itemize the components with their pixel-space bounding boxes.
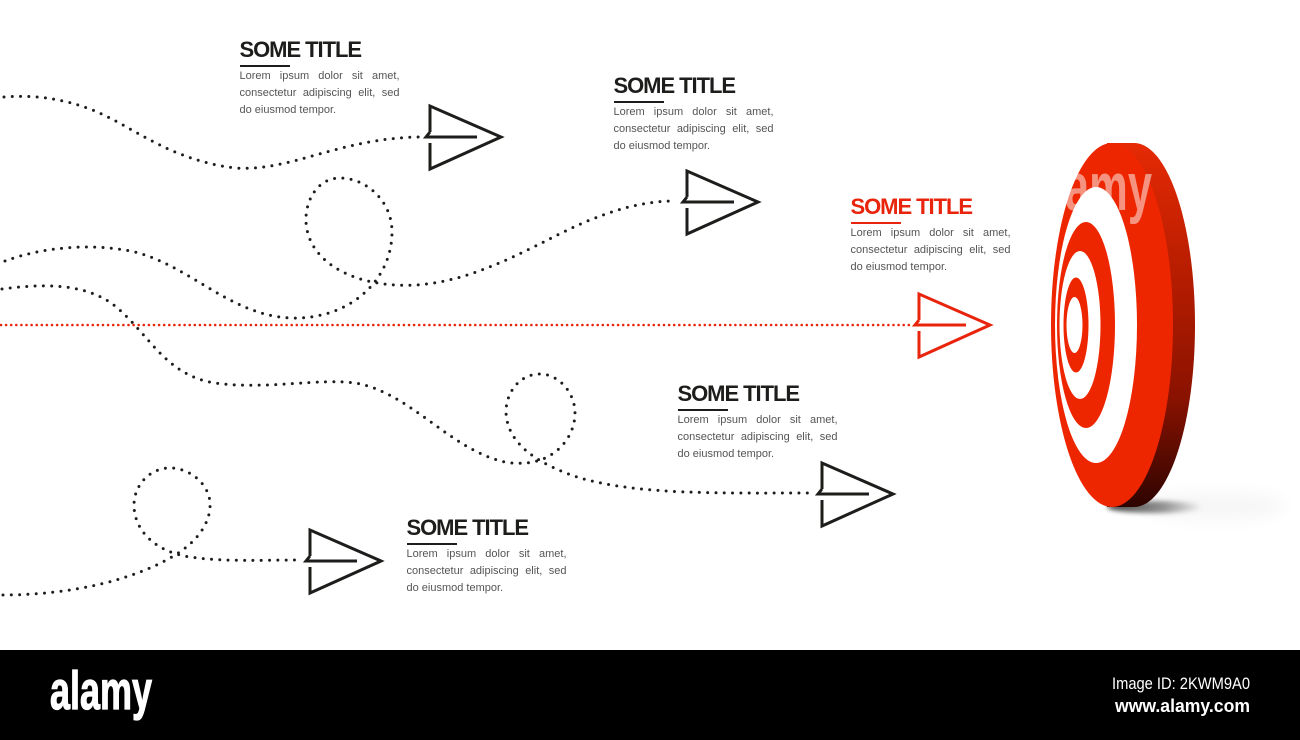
text block 4: [678, 381, 838, 460]
text block 5: do eiusmod tempor.: [406, 582, 503, 594]
paper plane 4: [818, 463, 893, 526]
dotted path 2 with loop: [5, 178, 676, 318]
dotted path 4 with loop: [3, 468, 300, 595]
text block 2: [614, 73, 774, 152]
bottom black bar: [0, 650, 1300, 740]
text block 5: consectetur adipiscing elit, sed: [406, 565, 566, 577]
paper plane 5: [306, 530, 381, 593]
paper plane 2: [683, 171, 758, 234]
text block 4: do eiusmod tempor.: [678, 448, 774, 460]
website: www.alamy.com: [1114, 696, 1250, 716]
text block 4: Lorem ipsum dolor sit amet,: [678, 414, 838, 426]
text block 1: do eiusmod tempor.: [240, 104, 336, 116]
text block 4: SOME TITLE: [678, 381, 799, 406]
text block 5: Lorem ipsum dolor sit amet,: [406, 548, 566, 560]
alamy logo: alamy: [50, 661, 152, 721]
text block 3 red: [850, 194, 1010, 273]
target shadow: [1107, 492, 1287, 520]
dotted path 1: [4, 96, 420, 168]
text block 1: [240, 37, 400, 116]
text block 1: consectetur adipiscing elit, sed: [240, 87, 400, 99]
text block 2: do eiusmod tempor.: [614, 140, 710, 152]
text block 3 red: SOME TITLE: [850, 194, 972, 219]
text block 5: [406, 515, 566, 594]
text block 3 red: consectetur adipiscing elit, sed: [850, 244, 1010, 256]
image id: Image ID: 2KWM9A0: [1112, 674, 1250, 693]
text block 1: Lorem ipsum dolor sit amet,: [240, 70, 400, 82]
dotted path 3 with loop: [2, 286, 810, 493]
paper plane 1: [426, 106, 501, 169]
text block 3 red: do eiusmod tempor.: [850, 261, 947, 273]
paper plane 3 red: [915, 294, 990, 357]
watermark on target: amy: [1065, 149, 1152, 225]
text block 2: Lorem ipsum dolor sit amet,: [614, 106, 774, 118]
text block 4: consectetur adipiscing elit, sed: [678, 431, 838, 443]
text block 5: SOME TITLE: [406, 515, 528, 540]
text block 3 red: Lorem ipsum dolor sit amet,: [850, 227, 1010, 239]
red straight dotted path: [1, 324, 910, 326]
text block 1: SOME TITLE: [240, 37, 361, 62]
text block 2: SOME TITLE: [614, 73, 735, 98]
text block 2: consectetur adipiscing elit, sed: [614, 123, 774, 135]
target bullseye: [1051, 143, 1195, 507]
